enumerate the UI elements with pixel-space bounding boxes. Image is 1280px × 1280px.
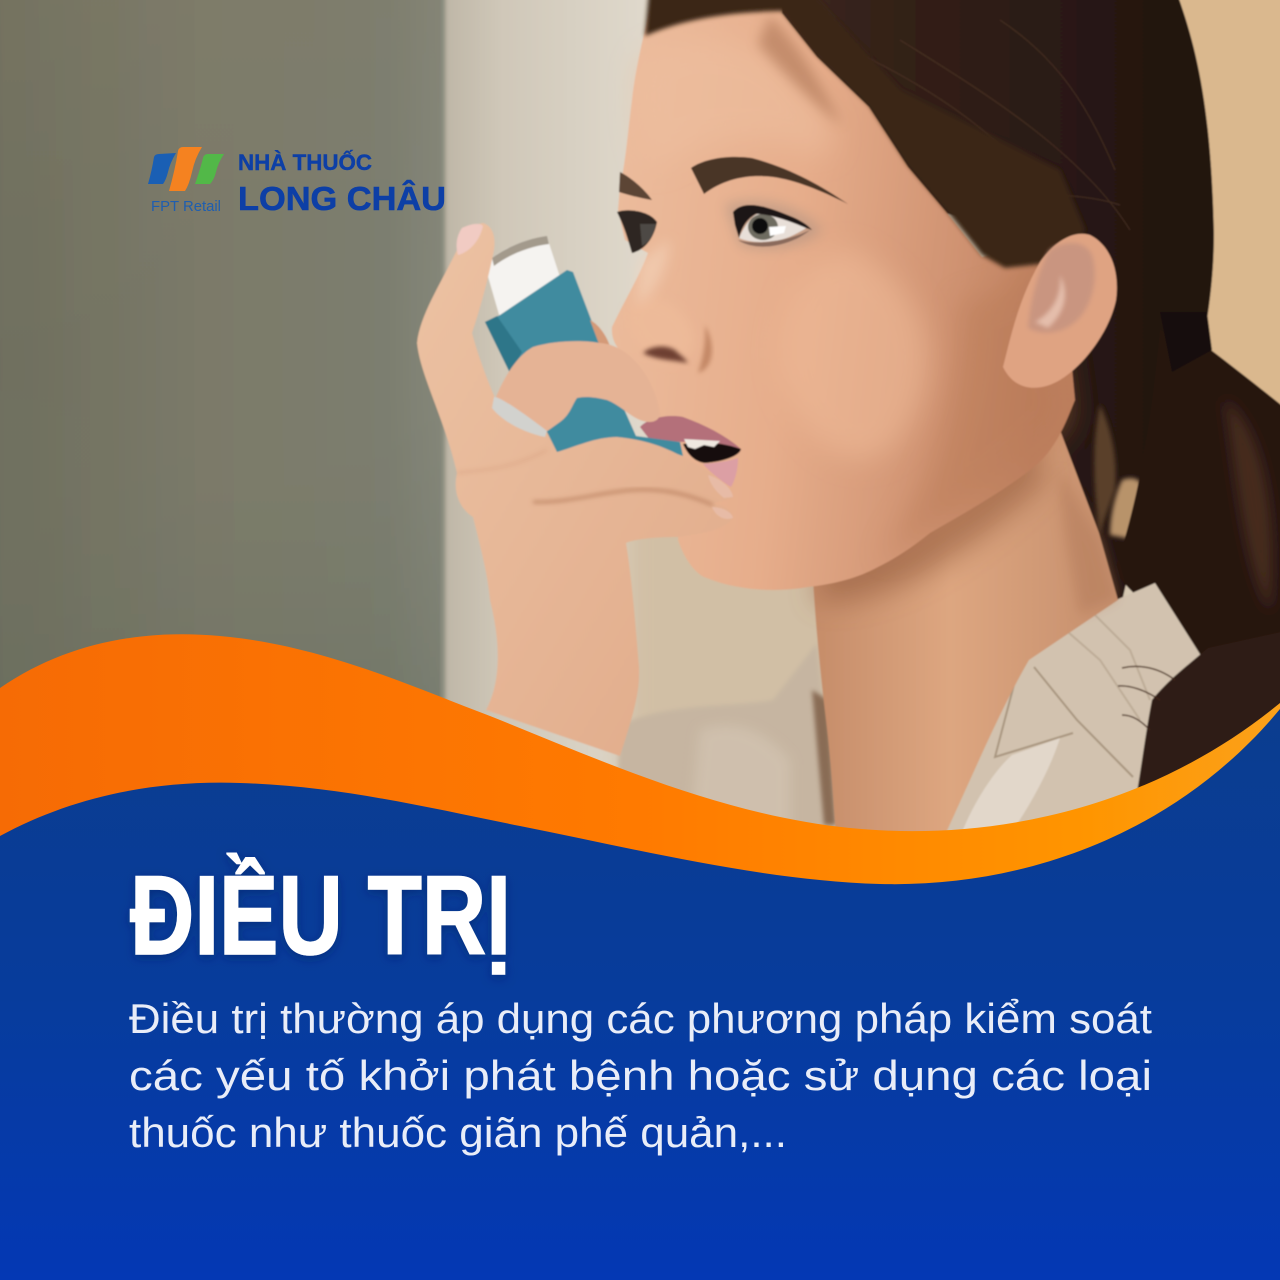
hand [417,223,733,756]
index finger [496,341,660,432]
forehead highlight [637,39,833,170]
lower hair wisps over collar [1118,630,1280,798]
right eye [725,201,822,249]
shirt [615,583,1205,835]
finger creases [533,490,713,505]
body text [129,995,1152,1156]
soft hairline [645,0,1085,268]
photo: woman using an asthma inhaler [0,0,1280,920]
finger behind inhaler [590,320,612,355]
thumb and palm [417,223,733,756]
ring [492,397,547,437]
right eyebrow [691,157,848,204]
logo line one: NHÀ THUỐC [238,149,372,175]
body text: các yếu tố khởi phát bệnh hoặc sử dụng các loại [129,1052,1152,1099]
body text: Điều trị thường áp dụng các phương pháp kiểm soát [129,995,1152,1042]
body text: thuốc như thuốc giãn phế quản,... [129,1109,787,1156]
thumbnail [457,224,483,255]
logo caption: FPT Retail [151,199,221,215]
fingernails [708,475,733,498]
left eye [617,210,657,253]
inhaler body [485,270,683,456]
hair strands [830,20,1130,230]
logo: Nhà thuốc Long Châu [148,147,446,217]
heading: ĐIỀU TRỊ [130,853,511,978]
collar seam and placket [995,610,1150,777]
background wall [0,0,1280,920]
nostril [643,346,688,363]
orange wave [0,634,1280,900]
logo line two: LONG CHÂU [238,180,446,217]
inhaler [485,236,683,456]
neck [812,430,1118,835]
ear [1003,234,1117,388]
face [612,0,1117,590]
left eyebrow [619,172,652,200]
blue panel [0,709,1280,1280]
lips and mouth [640,416,741,487]
hair [650,0,1280,800]
canister [487,237,560,318]
nose highlight [628,298,694,362]
icon: FPT logo mark [148,147,224,191]
